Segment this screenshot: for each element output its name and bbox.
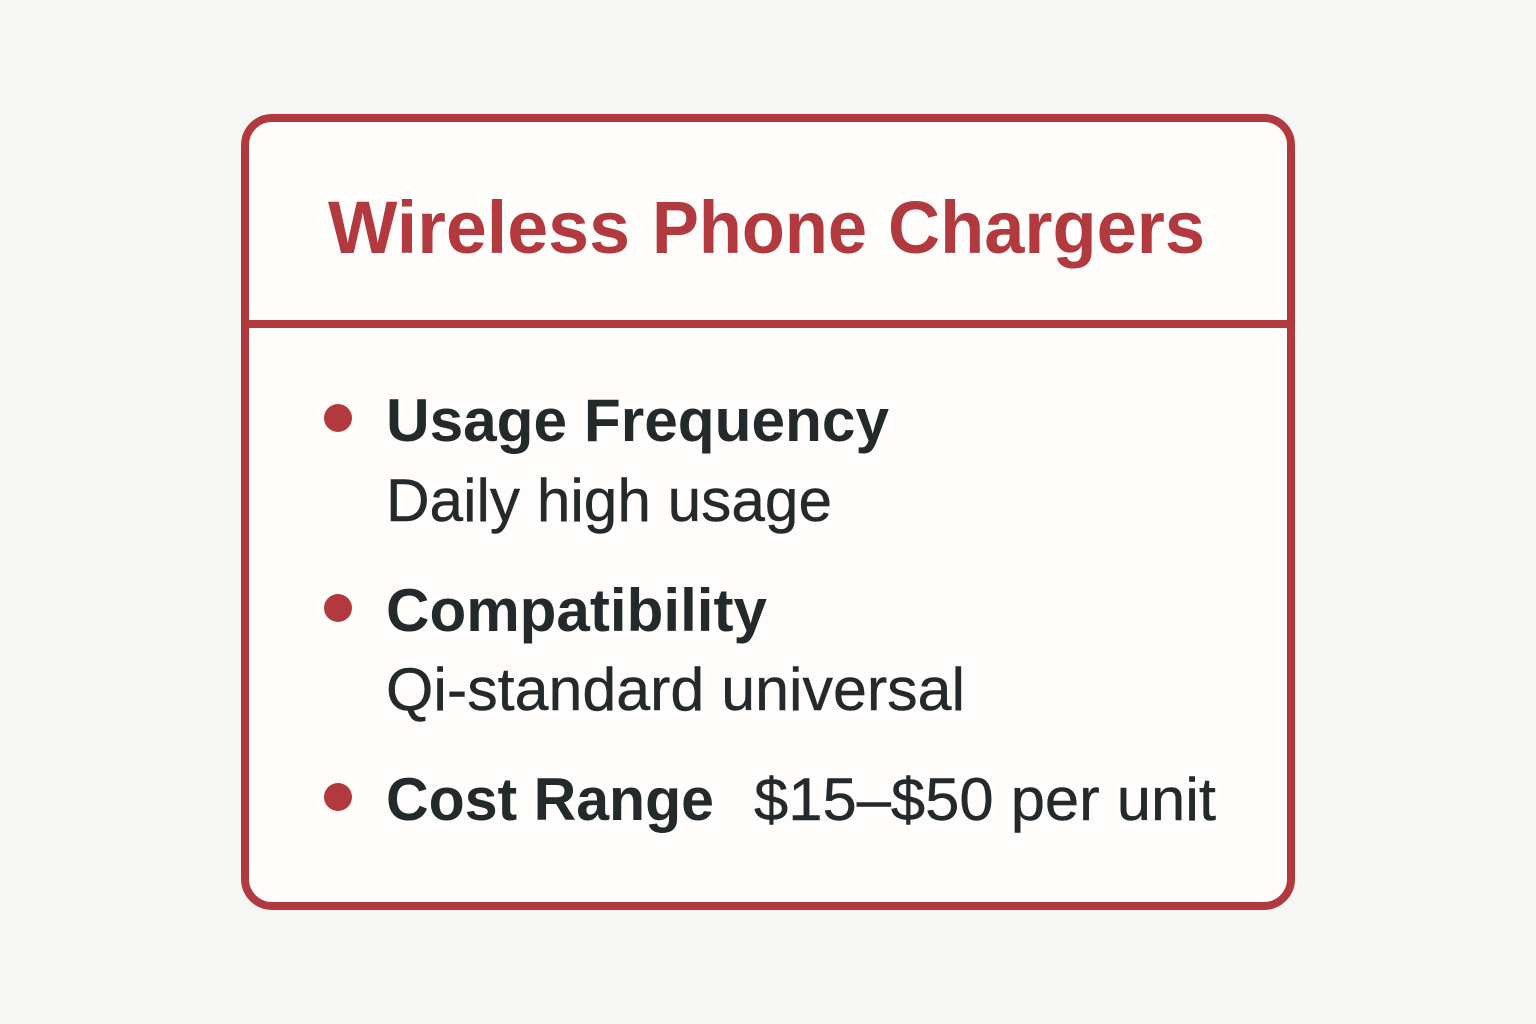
title bbox=[328, 186, 1205, 269]
value: Daily high usage bbox=[386, 467, 832, 534]
bullet bbox=[324, 783, 352, 811]
list item: cost range bbox=[324, 766, 1216, 833]
title: Phone bbox=[652, 186, 867, 269]
title: Wireless bbox=[328, 186, 630, 269]
label: Usage Frequency bbox=[386, 387, 890, 454]
panel: card bbox=[245, 118, 1291, 906]
value: $15–$50 per unit bbox=[754, 766, 1216, 833]
heading divider bbox=[245, 320, 1291, 328]
list item: usage frequency bbox=[324, 387, 890, 534]
label: Compatibility bbox=[386, 577, 768, 644]
value: Qi-standard universal bbox=[386, 656, 965, 723]
title: Chargers bbox=[888, 186, 1205, 269]
list item: compatibility bbox=[324, 577, 965, 723]
label: Cost Range bbox=[386, 766, 714, 833]
bullet bbox=[324, 404, 352, 432]
bullet bbox=[324, 594, 352, 622]
